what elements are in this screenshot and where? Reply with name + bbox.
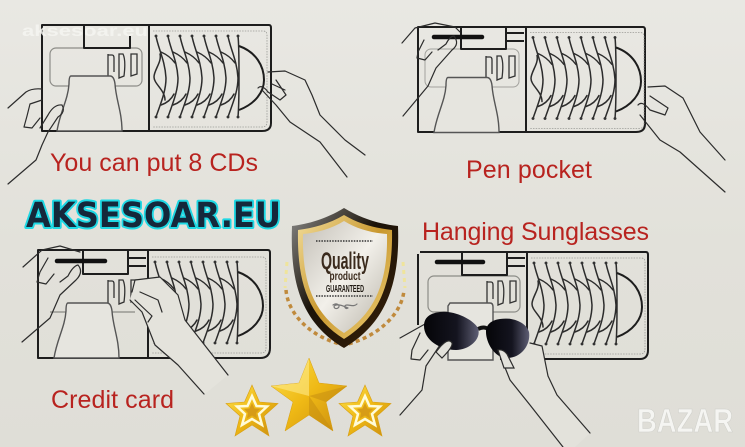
CD sleeves: [153, 31, 267, 127]
shield text: Quality: [321, 248, 369, 275]
organizer outline: [418, 27, 645, 132]
badge: quality shield: GUARANTEED: [326, 284, 364, 295]
badge: quality shield: [285, 208, 405, 348]
laurel wreath: [286, 290, 404, 345]
left hand: [400, 324, 452, 415]
caption: Hanging Sunglasses: [422, 218, 649, 246]
CD sleeves: [530, 32, 644, 128]
left hand: [8, 89, 63, 184]
top pocket: [83, 250, 146, 274]
badge: quality shield: product: [330, 269, 360, 283]
caption: Credit card: [51, 386, 174, 414]
organizer outline: [418, 252, 648, 359]
front pocket: [434, 78, 499, 132]
card slots: [108, 280, 137, 304]
left hand: [22, 246, 81, 342]
thumbs: [436, 341, 514, 368]
front pocket: [54, 303, 119, 358]
shield: [292, 208, 398, 348]
sunglasses: [424, 312, 529, 358]
organizer outline: [38, 250, 270, 358]
pen: [434, 35, 482, 39]
panel: credit card: [22, 246, 270, 414]
card holder panel: [428, 276, 520, 312]
card holder panel: [425, 49, 519, 87]
centre star: [271, 358, 347, 431]
caption: Pen pocket: [466, 156, 592, 184]
caption: You can put 8 CDs: [50, 149, 258, 177]
stars: [226, 358, 391, 436]
middle hand: [130, 277, 228, 394]
faint site watermark: aksesoar.eu: [22, 23, 148, 40]
CD sleeves: [531, 258, 645, 354]
card slots: [486, 56, 515, 80]
panel: you can put 8 CDs: [8, 23, 365, 184]
pen: [57, 259, 105, 263]
right hand: [258, 71, 365, 177]
top pocket: [461, 27, 524, 49]
left star: [226, 385, 278, 436]
left hand: [402, 23, 460, 116]
card slots: [108, 54, 137, 78]
shield dotted rule: [316, 241, 373, 296]
card slots: [487, 281, 516, 305]
signature: [333, 304, 357, 309]
organizer outline: [42, 25, 271, 131]
pen: [437, 260, 483, 264]
top pocket: [462, 252, 525, 275]
card holder panel: [50, 48, 142, 86]
front pocket: [448, 303, 493, 360]
CD sleeves: [152, 257, 266, 353]
panel: pen pocket: [402, 23, 725, 192]
right hand: [497, 343, 590, 447]
top pocket: [84, 25, 130, 48]
card holder line: [50, 311, 135, 313]
right star: [339, 385, 391, 436]
front pocket: [57, 76, 122, 131]
right hand: [638, 86, 725, 192]
panel: hanging sunglasses: [400, 218, 649, 447]
brand name: AKSESOAR.EU: [26, 196, 281, 236]
